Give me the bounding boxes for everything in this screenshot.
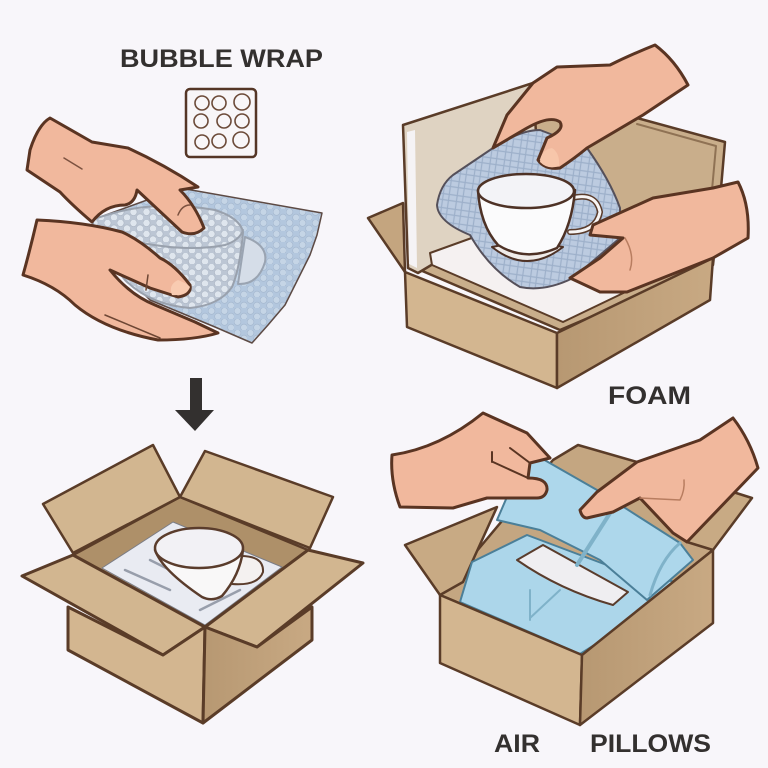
box front faces [68, 607, 205, 723]
box interior [440, 445, 713, 655]
lower hand [23, 220, 218, 340]
box front [440, 595, 582, 725]
right flap [205, 550, 363, 647]
left flap [368, 203, 405, 272]
upper hand [27, 118, 204, 234]
cup [155, 528, 263, 599]
top hand [493, 45, 688, 168]
label: pillows: PILLOWS [590, 730, 711, 758]
left hand [392, 413, 550, 508]
cup under wrap [92, 206, 265, 308]
right flap [687, 492, 752, 550]
foam base [430, 235, 640, 322]
bubble wrap sheet [92, 188, 322, 343]
icon: bubble wrap sheet [186, 89, 256, 157]
back left flap [43, 445, 180, 553]
box interior [73, 497, 308, 627]
back right flap [180, 451, 333, 548]
title: bubble wrap: BUBBLE WRAP [120, 45, 323, 73]
blue pillow [460, 535, 690, 654]
box front [405, 272, 557, 388]
label: air: AIR [494, 730, 540, 758]
right hand [580, 418, 758, 542]
panel: air pillows box [392, 413, 758, 725]
panel: cup packed in open box [22, 445, 363, 723]
panel: wrapping cup in bubble wrap [23, 118, 322, 343]
upper pillow [497, 450, 693, 600]
foam back panel [403, 83, 540, 273]
cup [478, 174, 600, 261]
paper filling [102, 522, 282, 625]
left flap [22, 555, 205, 655]
label: foam: FOAM [608, 382, 691, 410]
box back wall [420, 118, 725, 330]
arrow: down [175, 378, 214, 431]
cloth wrap [437, 130, 620, 288]
right hand [570, 182, 748, 292]
panel: foam lined box [368, 45, 748, 388]
left flap [405, 507, 497, 595]
white card [517, 545, 628, 605]
